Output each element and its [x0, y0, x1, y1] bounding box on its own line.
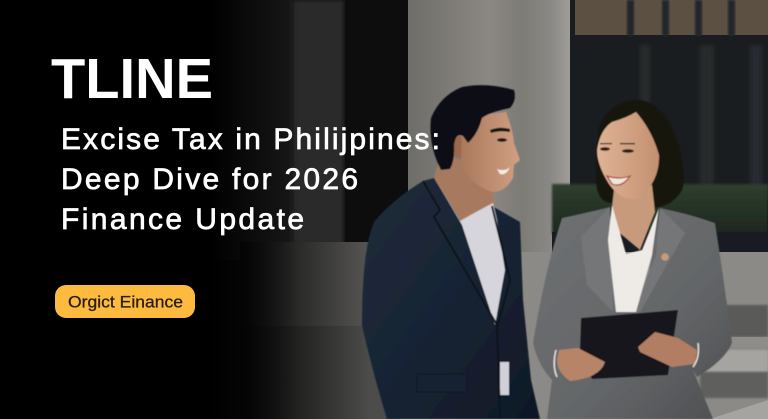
- woman's white blouse: [608, 205, 659, 312]
- man's jacket lapel and pocket: [417, 181, 510, 419]
- logo wordmark: TLINE: [51, 47, 213, 111]
- article headline: Finance Update: [61, 203, 304, 236]
- man's eye and brow: [490, 128, 510, 142]
- woman's lapel pin: [661, 253, 669, 261]
- man's smile: [497, 167, 510, 174]
- man's shirt front: [434, 176, 505, 325]
- article headline: Deep Dive for 2026: [61, 163, 358, 196]
- person: woman in grey suit holding a tablet: [533, 100, 732, 419]
- woman's lapels: [581, 207, 685, 312]
- woman's neck: [610, 185, 655, 250]
- category pill: Orgict Einance: [68, 294, 183, 312]
- person: man in navy suit: [362, 85, 540, 419]
- woman's hair back: [596, 100, 684, 208]
- man's neck and ear: [434, 136, 494, 222]
- article headline: [61, 123, 440, 236]
- article headline: Excise Tax in Philijpines:: [61, 123, 440, 156]
- man's navy suit jacket: [362, 178, 540, 419]
- woman's shirt cuffs: [554, 343, 698, 377]
- man's face: [461, 112, 520, 192]
- woman's eyes and brows: [600, 143, 635, 153]
- woman's grey blazer: [533, 207, 732, 419]
- woman's tablet: [580, 310, 678, 379]
- woman's left hand: [557, 348, 605, 381]
- man's hair: [430, 85, 515, 170]
- woman's smile: [607, 176, 630, 185]
- woman's face: [597, 112, 659, 199]
- woman's right hand: [638, 332, 697, 367]
- category pill: [55, 285, 195, 318]
- man's lower shirt: [500, 362, 509, 395]
